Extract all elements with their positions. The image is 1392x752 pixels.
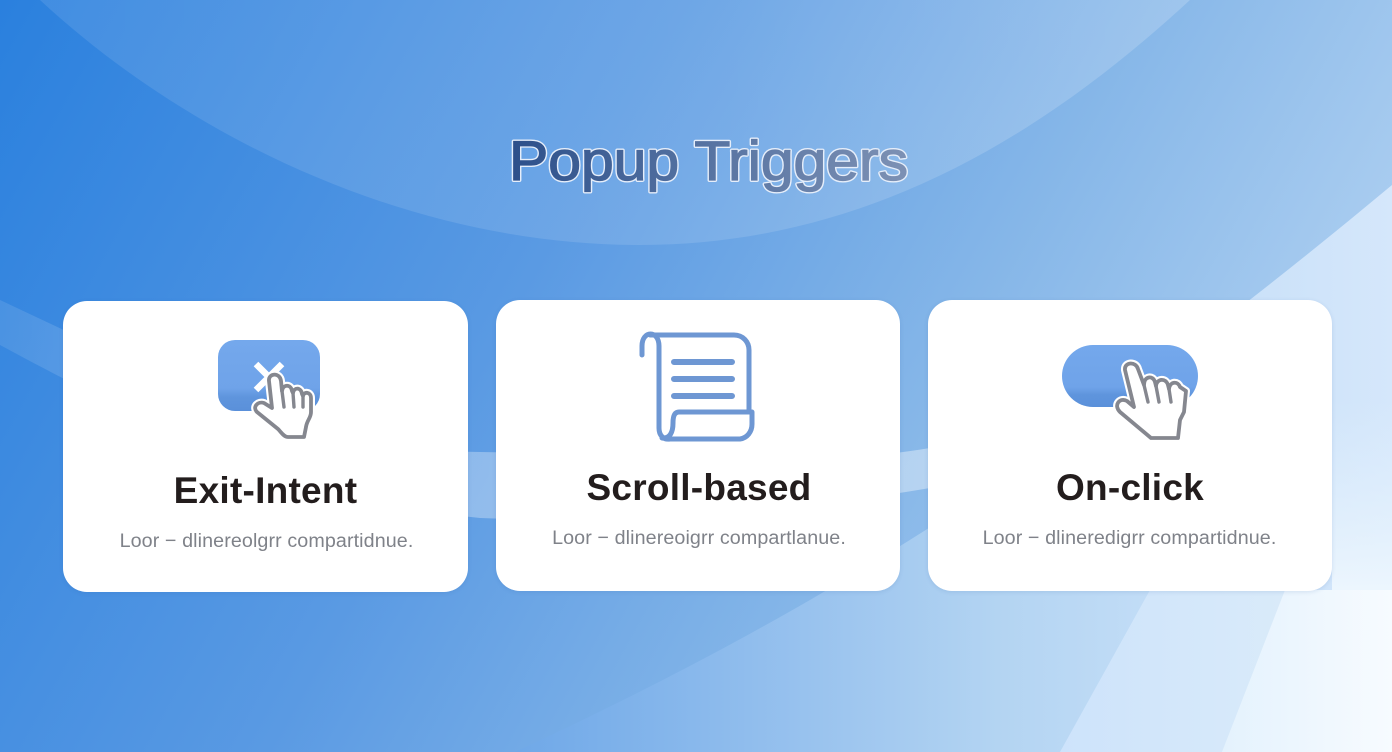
description: Loor − dlineredigrr compartidnue.	[983, 527, 1276, 549]
description: Loor − dlinereoigrr compartlanue.	[552, 527, 846, 549]
heading: Scroll-based: Scroll-based	[586, 467, 812, 508]
title: Popup Triggers	[509, 129, 908, 192]
description: Loor − dlinereolgrr compartidnue.	[120, 530, 413, 552]
heading: On-click: On-click	[1056, 467, 1204, 508]
icon: scroll document	[642, 334, 752, 439]
heading: Exit-Intent: Exit-Intent	[174, 470, 357, 511]
panel: Scroll-based	[496, 300, 900, 591]
icon: click button with cursor	[1062, 345, 1198, 438]
panel: On-click	[928, 300, 1332, 591]
panel: Exit-Intent	[63, 301, 468, 592]
title: Popup Triggers	[509, 129, 908, 192]
icon: exit popup with cursor	[218, 340, 320, 437]
